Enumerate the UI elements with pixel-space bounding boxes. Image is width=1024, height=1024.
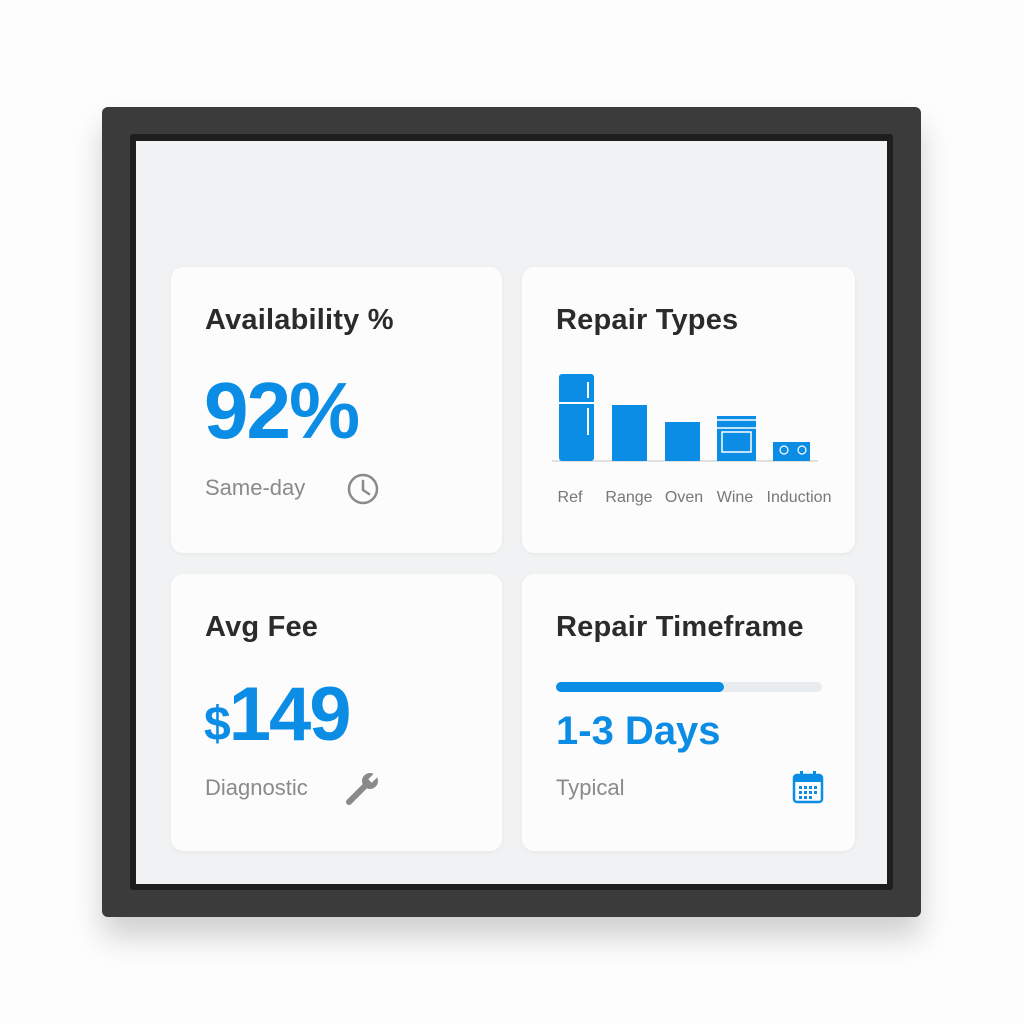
icon: clock: [348, 474, 378, 504]
bar chart: Range: [605, 489, 653, 506]
big number: 1-3 Days: [556, 709, 721, 753]
bar chart: Induction: [767, 489, 831, 506]
big number: $149: [204, 672, 350, 757]
bar chart: Oven: [665, 489, 703, 506]
icon: wrench: [346, 773, 378, 805]
panel: availability: [171, 267, 502, 553]
icon: calendar: [792, 771, 824, 804]
big number: 92%: [204, 366, 358, 455]
panel: repair types: [522, 267, 855, 553]
progress bar: [556, 682, 822, 692]
heading: Repair Types: [556, 304, 738, 336]
sublabel: Typical: [556, 775, 624, 800]
monitor frame: [102, 107, 921, 917]
sublabel: Diagnostic: [205, 775, 308, 800]
panel: repair timeframe: [522, 574, 855, 851]
heading: Avg Fee: [205, 611, 318, 643]
bar chart: [552, 374, 831, 506]
heading: Availability %: [205, 304, 394, 336]
bar chart: Wine: [717, 489, 753, 506]
bar chart: Ref: [558, 489, 583, 506]
panel: avg fee: [171, 574, 502, 851]
sublabel: Same-day: [205, 475, 305, 500]
heading: Repair Timeframe: [556, 611, 804, 643]
